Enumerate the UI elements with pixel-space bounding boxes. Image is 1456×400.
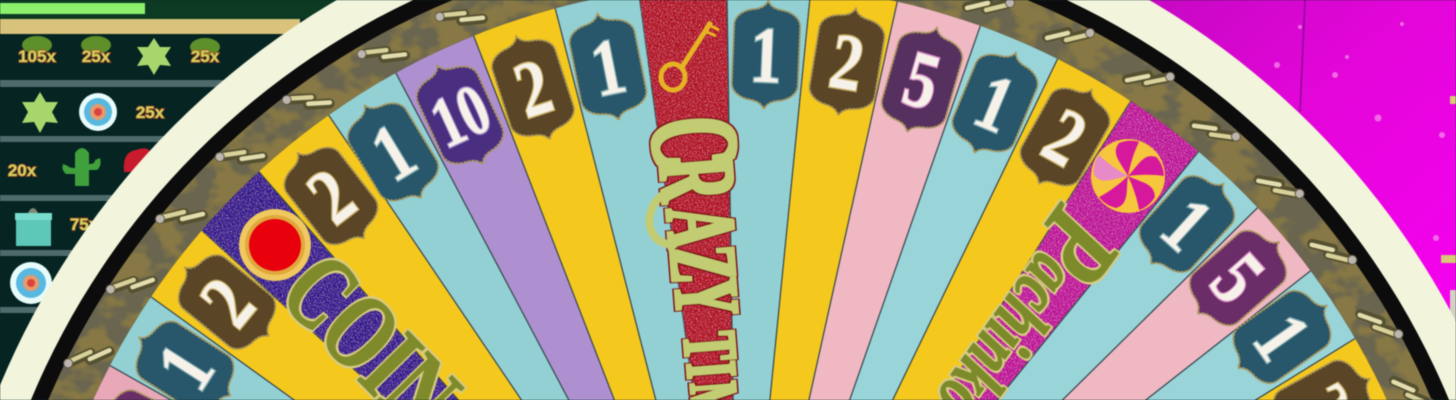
segment glitter magenta bbox=[948, 101, 1198, 400]
plaque 1: 1 bbox=[356, 105, 430, 198]
segment glitter purple bbox=[202, 172, 458, 400]
plaque 5: 5 bbox=[1194, 236, 1282, 320]
segment yellow right bbox=[1256, 338, 1388, 400]
plaque 1 bbox=[122, 310, 248, 400]
label: Pachinko: P bbox=[1008, 185, 1146, 305]
segment blue bbox=[996, 152, 1258, 400]
swash of the R bbox=[649, 192, 676, 244]
row 4 prizes bbox=[15, 208, 99, 246]
plaque 10: 10 bbox=[419, 68, 502, 163]
label: CRAZY TIME: I bbox=[671, 359, 752, 381]
segment blue bbox=[328, 72, 568, 400]
row 3 prizes bbox=[8, 148, 150, 186]
background: left game board panel bbox=[0, 0, 480, 400]
row 1 prizes: 25x bbox=[82, 47, 111, 66]
segment pink bbox=[1063, 208, 1311, 400]
label: CRAZY TIME bbox=[624, 112, 785, 400]
plaque 1 bbox=[565, 8, 651, 126]
segment yellow bbox=[258, 115, 522, 400]
segment yellow bbox=[770, 0, 898, 400]
label: CRAZY TIME: T bbox=[666, 329, 753, 364]
plaque 1 bbox=[1219, 279, 1345, 395]
row 3 prizes: 20x bbox=[8, 161, 37, 180]
segment yellow bbox=[893, 58, 1131, 400]
plaque 10 bbox=[407, 52, 513, 178]
segment blue bbox=[1146, 270, 1356, 400]
segment blue bbox=[849, 26, 1058, 400]
plaque 1: 1 bbox=[1236, 298, 1328, 376]
plaque 1 bbox=[731, 0, 801, 110]
label: CRAZY TIME: R bbox=[634, 152, 759, 206]
segment yellow bbox=[474, 8, 656, 400]
icon: golden key bbox=[661, 22, 719, 90]
segment yellow bbox=[150, 230, 382, 400]
row 1 prizes bbox=[18, 36, 220, 75]
segment pink bbox=[808, 1, 980, 400]
plaque 5 bbox=[1176, 218, 1300, 338]
icon: candy bbox=[1091, 139, 1165, 213]
segment blue bbox=[726, 0, 817, 400]
row 5 target bbox=[10, 262, 52, 304]
plaque 2 bbox=[1010, 74, 1120, 200]
plaque 2: 2 bbox=[504, 40, 562, 135]
plaque 1: 1 bbox=[584, 20, 632, 114]
plaque 2 bbox=[164, 242, 290, 362]
plaque 1 bbox=[1126, 162, 1248, 286]
background: magenta wall bbox=[1000, 0, 1456, 400]
plaque 2 bbox=[485, 26, 581, 150]
segment pink far left bbox=[92, 366, 170, 400]
segment glitter red bbox=[640, 0, 734, 400]
segment lilac bbox=[396, 36, 614, 400]
plaque 2 bbox=[806, 3, 888, 121]
plaque 2: 2 bbox=[824, 15, 870, 109]
row 2 prizes bbox=[22, 92, 165, 133]
row 1 prizes: 105x bbox=[18, 47, 56, 66]
plaque 2 bbox=[272, 133, 390, 259]
plaque 2: 2 bbox=[182, 261, 272, 343]
segment blue bbox=[110, 296, 294, 400]
plaque 2 far right bbox=[1259, 350, 1385, 400]
plaque 1 bbox=[944, 40, 1046, 166]
plaque 5: 5 bbox=[894, 33, 950, 127]
plaque 2: 2 bbox=[1029, 90, 1101, 184]
plaque 5 bbox=[875, 19, 969, 141]
row 1 prizes: 25x bbox=[191, 47, 220, 66]
plaque 1: 1 bbox=[963, 56, 1027, 150]
label: CRAZY TIME: Z bbox=[649, 242, 758, 286]
label: CRAZY TIME: Y bbox=[654, 275, 758, 320]
label: CRAZY TIME: A bbox=[644, 203, 757, 251]
row 4 prizes: 75x bbox=[70, 215, 99, 234]
plaque 1: 1 bbox=[1145, 180, 1229, 268]
plaque 1 bbox=[337, 89, 449, 215]
plaque 1: 1 bbox=[748, 10, 784, 100]
segment blue bbox=[555, 0, 692, 400]
label: CRAZY TIME: C bbox=[624, 112, 766, 172]
label: Pachinko bbox=[903, 185, 1146, 400]
plaque 2: 2 bbox=[291, 151, 371, 241]
row 2 prizes: 25x bbox=[136, 103, 165, 122]
icon: red coin bbox=[239, 209, 311, 281]
plaque 5 far left bbox=[85, 381, 211, 400]
